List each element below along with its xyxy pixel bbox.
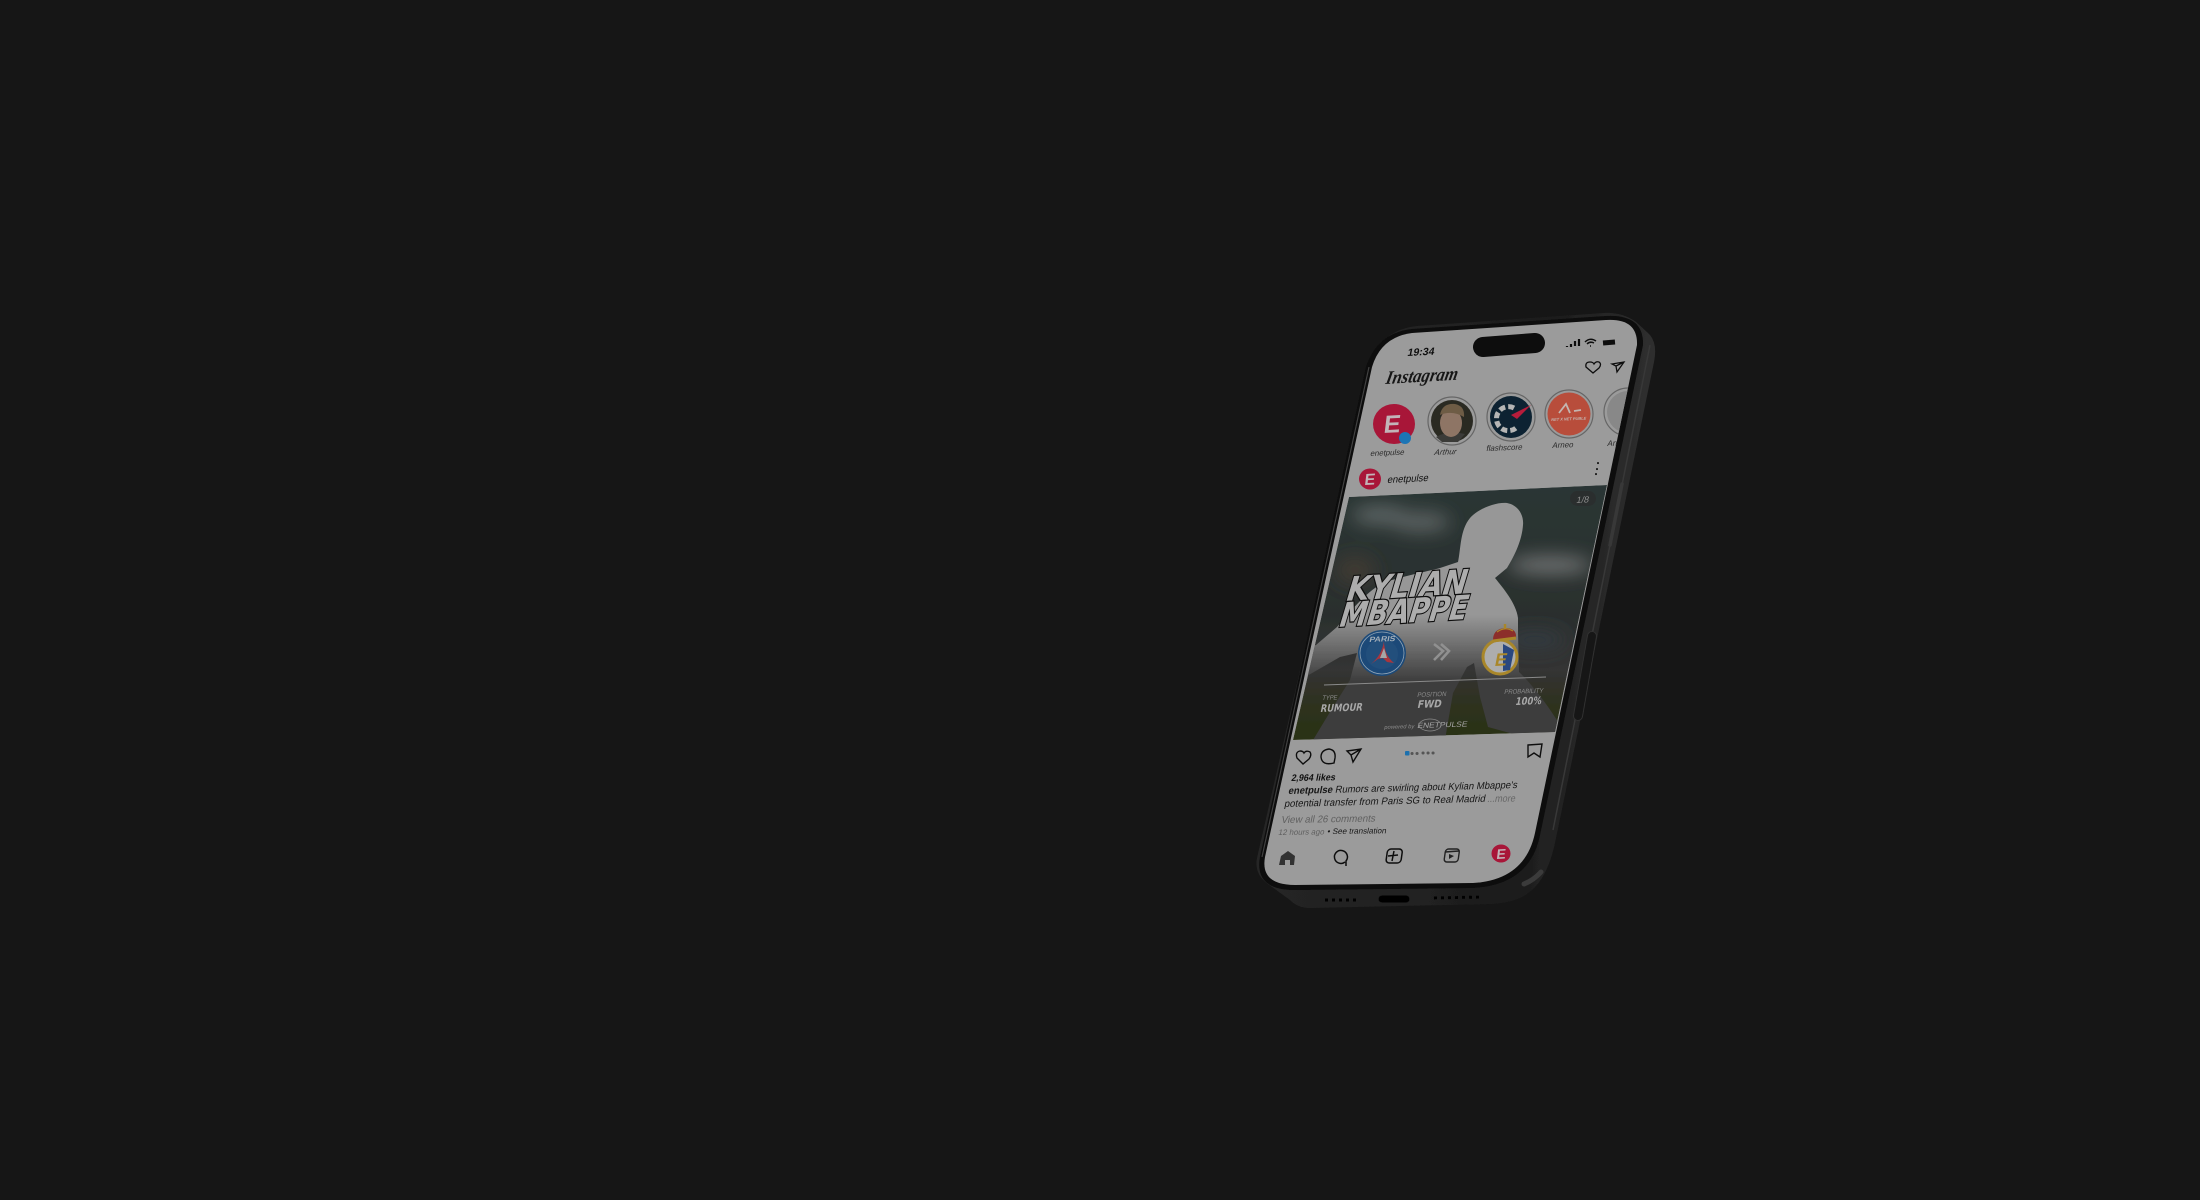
volume button <box>1610 484 1622 545</box>
story: flashscore <box>1486 393 1535 453</box>
screen <box>1264 320 1637 885</box>
club badge: real madrid <box>1483 624 1517 674</box>
story label: Arneo <box>1552 440 1575 450</box>
crest <box>1483 640 1517 674</box>
more link: ...more <box>1486 794 1517 805</box>
wifi icon <box>1585 339 1596 346</box>
monogram: E <box>1493 650 1509 670</box>
psg text: PARIS <box>1369 634 1396 644</box>
arneo mark <box>1559 404 1581 413</box>
time: 19:34 <box>1406 346 1436 359</box>
club badge: psg <box>1358 630 1406 676</box>
likes count: 2,964 likes <box>1290 772 1337 784</box>
view comments: View all 26 comments <box>1280 814 1377 826</box>
post header <box>1359 463 1598 490</box>
bezel <box>1259 316 1643 890</box>
send icon <box>1612 362 1624 372</box>
create icon <box>1386 849 1403 863</box>
name: kylian: KYLIAN <box>1341 563 1473 610</box>
arneo small text: NET X NET PUBLE <box>1551 416 1587 422</box>
stat: probability <box>1504 688 1544 705</box>
status bar <box>1406 339 1615 359</box>
player silhouette <box>1300 503 1560 745</box>
profile avatar <box>1492 844 1510 862</box>
see translation: • See translation <box>1327 826 1387 836</box>
stat: type: TYPE <box>1322 695 1339 702</box>
caption line one: enetpulse Rumors are swirling about Kylian Mbappe's <box>1287 780 1519 797</box>
share icon <box>1347 749 1361 762</box>
corner highlight <box>1524 872 1541 884</box>
image counter pill: 1/8 <box>1576 494 1590 505</box>
stat: type <box>1320 695 1362 712</box>
add badge <box>1399 432 1411 444</box>
E glyph: E <box>1382 410 1402 439</box>
side edge highlight <box>1553 345 1650 830</box>
story label: flashscore <box>1486 443 1524 453</box>
side button inner <box>1578 636 1592 716</box>
stat: probability: 100% <box>1514 695 1543 708</box>
stat: type: RUMOUR <box>1319 702 1364 715</box>
heart icon <box>1586 362 1600 373</box>
red needle <box>1511 405 1531 419</box>
eiffel tower <box>1371 641 1394 664</box>
phone mockup <box>1256 313 1655 908</box>
bottom navigation <box>1279 844 1510 866</box>
home icon <box>1279 851 1295 865</box>
username: enetpulse <box>1386 473 1430 486</box>
story label: enetpulse <box>1370 448 1406 458</box>
story: arthur <box>1428 397 1476 457</box>
post image <box>1293 485 1607 745</box>
powered by enetpulse: ENETPULSE <box>1417 720 1468 730</box>
blue sash <box>1503 644 1514 671</box>
image background <box>1293 485 1607 740</box>
speaker right <box>1434 897 1482 898</box>
stat: position: POSITION <box>1417 691 1447 699</box>
bookmark icon <box>1528 744 1542 757</box>
transfer arrows <box>1434 644 1449 660</box>
story: arneo <box>1545 390 1593 450</box>
usb port <box>1382 896 1406 902</box>
bottom speaker and port <box>1325 897 1482 900</box>
powered by enetpulse <box>1384 719 1468 731</box>
bezel inner line <box>1262 367 1369 857</box>
divider <box>1324 677 1546 685</box>
profile avatar: E <box>1496 846 1507 862</box>
hair <box>1440 404 1464 417</box>
stat: position: FWD <box>1416 698 1443 711</box>
side button <box>1578 636 1592 716</box>
stories row <box>1370 388 1652 458</box>
story: partial <box>1603 387 1628 446</box>
battery icon <box>1603 342 1615 343</box>
story label: Arthur <box>1433 447 1458 457</box>
dynamic island <box>1483 343 1535 347</box>
more menu <box>1596 463 1598 474</box>
caption block <box>1278 772 1519 837</box>
story: enetpulse <box>1370 404 1415 458</box>
reels icon <box>1444 849 1460 862</box>
stat: probability: PROBABILITY <box>1504 688 1545 696</box>
app header <box>1383 362 1624 389</box>
search icon <box>1334 850 1347 866</box>
stat: position <box>1418 692 1446 708</box>
powered by enetpulse: powered by <box>1384 724 1415 731</box>
carousel dots <box>1405 751 1433 756</box>
signal icon <box>1567 339 1579 347</box>
speaker left <box>1325 898 1356 902</box>
avatar <box>1359 468 1381 490</box>
avatar E: E <box>1364 471 1377 489</box>
crown <box>1493 628 1516 640</box>
instagram logo: Instagram <box>1383 364 1460 389</box>
action bar <box>1296 744 1542 764</box>
gauge icon <box>1496 407 1516 431</box>
timestamp: 12 hours ago <box>1278 828 1326 837</box>
image counter pill <box>1570 491 1596 506</box>
story label: Arr <box>1607 439 1619 448</box>
stadium lights <box>1335 506 1592 650</box>
shoulders <box>1436 433 1465 442</box>
caption line two: potential transfer from Paris SG to Real Madrid <box>1283 794 1487 810</box>
phone body <box>1256 313 1655 908</box>
name: mbappe: MBAPPE <box>1334 589 1474 636</box>
comment icon <box>1321 749 1335 764</box>
like icon <box>1296 751 1311 764</box>
face <box>1440 412 1462 437</box>
